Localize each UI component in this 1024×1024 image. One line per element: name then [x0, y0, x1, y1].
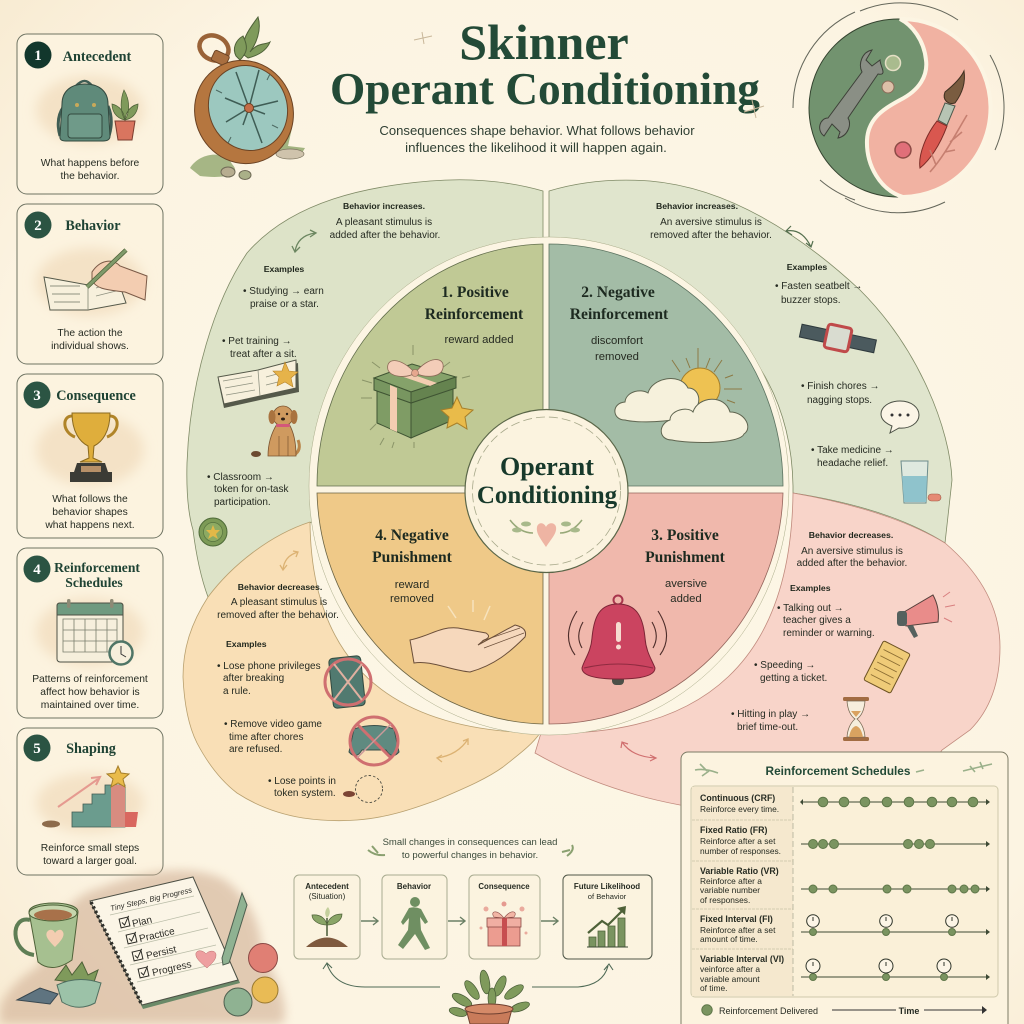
text: examples: • Speeding →	[754, 660, 815, 671]
badge 5: 5	[33, 741, 41, 757]
icon: sprout	[306, 907, 348, 947]
label: removed	[595, 351, 639, 363]
icon: phone crossed out	[325, 655, 371, 709]
checklist: Plan	[131, 915, 153, 930]
description: affect how behavior is	[40, 687, 140, 698]
flow box: antecedent: Antecedent	[305, 882, 349, 891]
description: toward a larger goal.	[43, 856, 137, 867]
coffee mug	[15, 903, 78, 968]
badge 3: 3	[33, 388, 41, 404]
label: reward added	[444, 334, 514, 346]
icon: gift	[480, 902, 528, 946]
text: outcome statement	[650, 201, 772, 241]
text: examples	[775, 262, 894, 469]
checklist	[119, 915, 193, 979]
text: closing message: to powerful changes in behavior.	[402, 850, 538, 861]
row: variable ratio	[700, 866, 990, 905]
text: outcome statement: added after the behavior.	[330, 230, 440, 241]
heading	[570, 284, 669, 323]
text: examples: time after chores	[229, 732, 303, 743]
icon: walking figure	[398, 897, 430, 950]
icon: open book with star	[218, 360, 299, 408]
row: fixed ratio	[700, 825, 990, 856]
panel title: Reinforcement Schedules	[766, 764, 911, 778]
row: fixed ratio: number of responses.	[700, 846, 781, 856]
row: variable ratio: Variable Ratio (VR)	[700, 866, 779, 876]
text: outcome statement: A pleasant stimulus is	[336, 217, 432, 228]
sidebar: five concept cards	[17, 34, 163, 875]
flow arrows	[361, 917, 558, 925]
badge 1: 1	[34, 48, 42, 64]
petal: positive punishment details	[535, 493, 1000, 810]
heading	[54, 560, 140, 590]
icon: sitting dog	[251, 406, 299, 457]
text: outcome statement: added after the behavior.	[797, 558, 907, 569]
text: examples: Examples	[790, 583, 831, 593]
label: removed	[390, 593, 434, 605]
text: examples: • Pet training →	[222, 336, 292, 347]
row: fixed ratio: Reinforce after a set	[700, 836, 776, 846]
flow diagram	[294, 875, 652, 1024]
icon: double arrow	[621, 742, 656, 761]
icon: ticket	[864, 641, 910, 693]
row: fixed interval: Fixed Interval (FI)	[700, 914, 773, 924]
icon: rising bar chart	[587, 906, 628, 947]
text: examples: token system.	[274, 788, 336, 799]
legend	[702, 1005, 987, 1016]
text: outcome statement: An aversive stimulus is	[801, 546, 903, 557]
badge 1	[24, 42, 52, 68]
icon: potted plant	[448, 969, 531, 1024]
text: examples	[217, 639, 336, 799]
icon: gift box	[361, 345, 473, 448]
text: examples: Examples	[264, 264, 304, 274]
label: aversive	[665, 578, 707, 590]
icon: curved arrow	[292, 230, 316, 252]
row: fixed ratio: Fixed Ratio (FR)	[700, 825, 768, 835]
text: examples: • Hitting in play →	[731, 709, 810, 720]
schedule table	[691, 786, 998, 997]
center title: Conditioning	[477, 482, 618, 509]
description: behavior shapes	[52, 507, 128, 518]
wood desk smear	[0, 870, 285, 1024]
badge 5	[24, 734, 50, 762]
flow box: antecedent	[294, 875, 360, 959]
card: reinforcement schedules	[17, 548, 163, 718]
legend: Reinforcement Delivered	[719, 1006, 818, 1016]
icon: sprigs	[695, 762, 992, 776]
row: fixed interval: Reinforce after a set	[700, 925, 776, 935]
label	[390, 579, 434, 605]
heading: Consequence	[56, 388, 136, 404]
row: continuous: Continuous (CRF)	[700, 793, 775, 803]
text: outcome statement: A pleasant stimulus is	[231, 597, 327, 608]
heading: Behavior	[65, 218, 121, 234]
icon: sun and clouds	[615, 348, 748, 442]
icon: gamepad crossed out	[349, 717, 399, 765]
text: outcome statement: Behavior increases.	[656, 201, 738, 211]
spiral notebook	[90, 877, 240, 1009]
text: examples: reminder or warning.	[783, 628, 875, 639]
icon: title sparkles	[414, 32, 764, 118]
icon: rising steps with star	[42, 766, 138, 828]
text: examples: brief time-out.	[737, 722, 798, 733]
text: examples: • Finish chores →	[801, 381, 880, 392]
row: variable interval: Variable Interval (VI)	[700, 954, 784, 964]
text: examples: nagging stops.	[807, 395, 872, 406]
description	[51, 328, 129, 352]
text: examples: after breaking	[223, 673, 284, 684]
text: examples: • Take medicine →	[811, 445, 894, 456]
quadrant: positive reinforcement	[317, 244, 543, 486]
icon: open hand	[410, 600, 526, 672]
notebook title: Tiny Steps, Big Progress	[109, 885, 193, 913]
label	[591, 335, 644, 363]
badge 4: 4	[33, 562, 41, 578]
card: behavior	[17, 204, 163, 364]
heading: Antecedent	[63, 49, 132, 65]
text: examples: token for on-task	[214, 484, 289, 495]
description: maintained over time.	[41, 700, 139, 711]
heading: Shaping	[66, 741, 116, 757]
heading: 1. Positive	[441, 284, 509, 301]
illustration: desk with notebook, mug and succulent	[0, 870, 285, 1024]
heart	[196, 951, 216, 968]
heading: Reinforcement	[570, 306, 669, 323]
heading	[372, 527, 453, 566]
flow box: future likelihood: Future Likelihood	[574, 882, 640, 891]
text: examples: • Lose phone privileges	[217, 661, 321, 672]
text: examples: • Remove video game	[224, 719, 322, 730]
text: examples: participation.	[214, 497, 271, 508]
text: examples	[207, 264, 324, 508]
heading: 3. Positive	[651, 527, 719, 544]
card: consequence	[17, 374, 163, 538]
icon: trophy	[65, 413, 117, 482]
text: outcome statement	[217, 582, 339, 621]
description: the behavior.	[61, 171, 119, 182]
heading: 4. Negative	[375, 527, 449, 544]
description: individual shows.	[51, 341, 129, 352]
text: examples	[731, 583, 875, 733]
row: variable interval: of time.	[700, 983, 727, 993]
text: closing message	[383, 837, 557, 861]
title	[330, 14, 760, 114]
paintbrush	[920, 71, 964, 168]
legend: Time	[899, 1006, 919, 1016]
wrench	[820, 50, 883, 138]
text: outcome statement: Behavior decreases.	[238, 582, 322, 592]
text: examples: are refused.	[229, 744, 282, 755]
text: examples: Examples	[787, 262, 827, 272]
icon: curved arrow	[280, 551, 298, 570]
description: What happens before	[41, 158, 139, 169]
petal: positive reinforcement details	[187, 180, 543, 597]
text: outcome statement: Behavior increases.	[343, 201, 425, 211]
checklist: Persist	[145, 944, 178, 962]
title: Operant Conditioning	[330, 64, 760, 114]
text: closing message: Small changes in consequences can lead	[383, 837, 557, 848]
icon: lost token	[343, 776, 382, 802]
label: added	[670, 593, 702, 605]
text: outcome statement: removed after the behavior.	[650, 230, 772, 241]
label	[665, 578, 707, 605]
feedback arrows	[323, 963, 613, 987]
text: examples: praise or a star.	[250, 299, 319, 310]
icon: megaphone	[897, 592, 955, 638]
icon: yin-yang with wrench and brush	[793, 3, 1004, 213]
pen	[222, 893, 247, 965]
icon: heart with sprigs	[510, 520, 582, 547]
flow box: antecedent: (Situation)	[309, 892, 346, 901]
label: discomfort	[591, 335, 644, 347]
title: Skinner	[459, 14, 629, 70]
icon: hand writing in book	[44, 250, 147, 310]
row: variable interval	[700, 954, 990, 993]
heading: 2. Negative	[581, 284, 655, 301]
center circle	[465, 410, 628, 572]
text: examples: • Classroom →	[207, 472, 274, 483]
succulent in bowl	[17, 962, 101, 1007]
description: What follows the	[52, 494, 128, 505]
badge 2	[24, 212, 52, 238]
heading: Punishment	[645, 549, 726, 566]
description	[32, 674, 148, 711]
description	[41, 843, 139, 867]
row: continuous	[700, 793, 990, 814]
icon: speech bubble	[881, 401, 919, 433]
text: examples: teacher gives a	[783, 615, 851, 626]
icon: seatbelt	[798, 318, 878, 358]
badge 3	[24, 382, 50, 408]
heading: Reinforcement	[425, 306, 524, 323]
icon: alarm bell	[568, 596, 667, 685]
heading: Punishment	[372, 549, 453, 566]
panel: reinforcement schedules	[681, 752, 1008, 1024]
text: examples: buzzer stops.	[781, 295, 840, 306]
row: variable interval: veinforce after a	[700, 964, 760, 974]
heading: Schedules	[65, 575, 123, 590]
icon: calendar and clock	[57, 599, 132, 664]
quadrant: negative reinforcement	[549, 244, 783, 486]
icon: pocket compass	[179, 17, 309, 180]
quadrant: positive punishment	[549, 493, 783, 724]
icon: backpack and plant	[58, 81, 138, 141]
icon: hourglass	[843, 697, 869, 741]
description: Reinforce small steps	[41, 843, 139, 854]
text: examples: getting a ticket.	[760, 673, 827, 684]
badge 4	[24, 556, 50, 582]
heading	[425, 284, 524, 323]
icon: water glass and pill	[901, 461, 941, 503]
subtitle	[379, 123, 695, 155]
text: examples: Examples	[226, 639, 267, 649]
petal: negative punishment details	[183, 522, 540, 821]
description	[44, 494, 135, 531]
heading: Reinforcement	[54, 560, 140, 575]
row: variable ratio: of responses.	[700, 895, 750, 905]
flow box: consequence: Consequence	[478, 882, 530, 891]
center title: Operant	[500, 452, 594, 481]
card: antecedent	[17, 34, 163, 194]
text: examples: treat after a sit.	[230, 349, 297, 360]
icon: message sprigs	[368, 845, 573, 856]
text: outcome statement	[330, 201, 440, 241]
row: variable interval: variable amount	[700, 974, 760, 984]
text: outcome statement: An aversive stimulus is	[660, 217, 762, 228]
text: outcome statement	[797, 530, 907, 569]
row: variable ratio: variable number	[700, 885, 760, 895]
checklist: Practice	[138, 926, 176, 945]
flow box: behavior: Behavior	[397, 882, 431, 891]
heading	[645, 527, 726, 566]
row: continuous: Reinforce every time.	[700, 804, 779, 814]
text: examples: • Studying → earn	[243, 286, 324, 297]
row: variable ratio: Reinforce after a	[700, 876, 762, 886]
row: fixed interval	[700, 914, 990, 944]
description: what happens next.	[44, 520, 135, 531]
text: examples: • Lose points in	[268, 776, 336, 787]
text: outcome statement: Behavior decreases.	[809, 530, 893, 540]
text: examples: a rule.	[223, 686, 251, 697]
card: shaping	[17, 728, 163, 875]
flow box: future likelihood	[563, 875, 652, 959]
badge 2: 2	[34, 218, 42, 234]
quadrant: negative punishment	[317, 493, 543, 724]
flow box: behavior	[382, 875, 447, 959]
icon: curved arrow	[786, 226, 813, 247]
center title	[477, 452, 618, 509]
description: Patterns of reinforcement	[32, 674, 148, 685]
icon: token	[199, 518, 227, 546]
flow box: future likelihood: of Behavior	[588, 892, 627, 901]
text: examples: • Talking out →	[777, 603, 844, 614]
icon: double arrow	[437, 739, 468, 762]
quadrant wheel	[309, 237, 789, 735]
description: The action the	[57, 328, 123, 339]
checklist: Progress	[151, 959, 193, 979]
flow box: consequence	[469, 875, 540, 959]
text: outcome statement: removed after the behavior.	[217, 610, 339, 621]
label: reward	[395, 579, 429, 591]
text: examples: • Fasten seatbelt →	[775, 281, 862, 292]
subtitle: Consequences shape behavior. What follows behavior	[379, 123, 695, 138]
buttons	[224, 944, 278, 1016]
text: examples: headache relief.	[817, 458, 888, 469]
petal: negative reinforcement details	[549, 180, 952, 543]
row: fixed interval: amount of time.	[700, 934, 758, 944]
subtitle: influences the likelihood it will happen again.	[405, 140, 667, 155]
description	[41, 158, 139, 182]
